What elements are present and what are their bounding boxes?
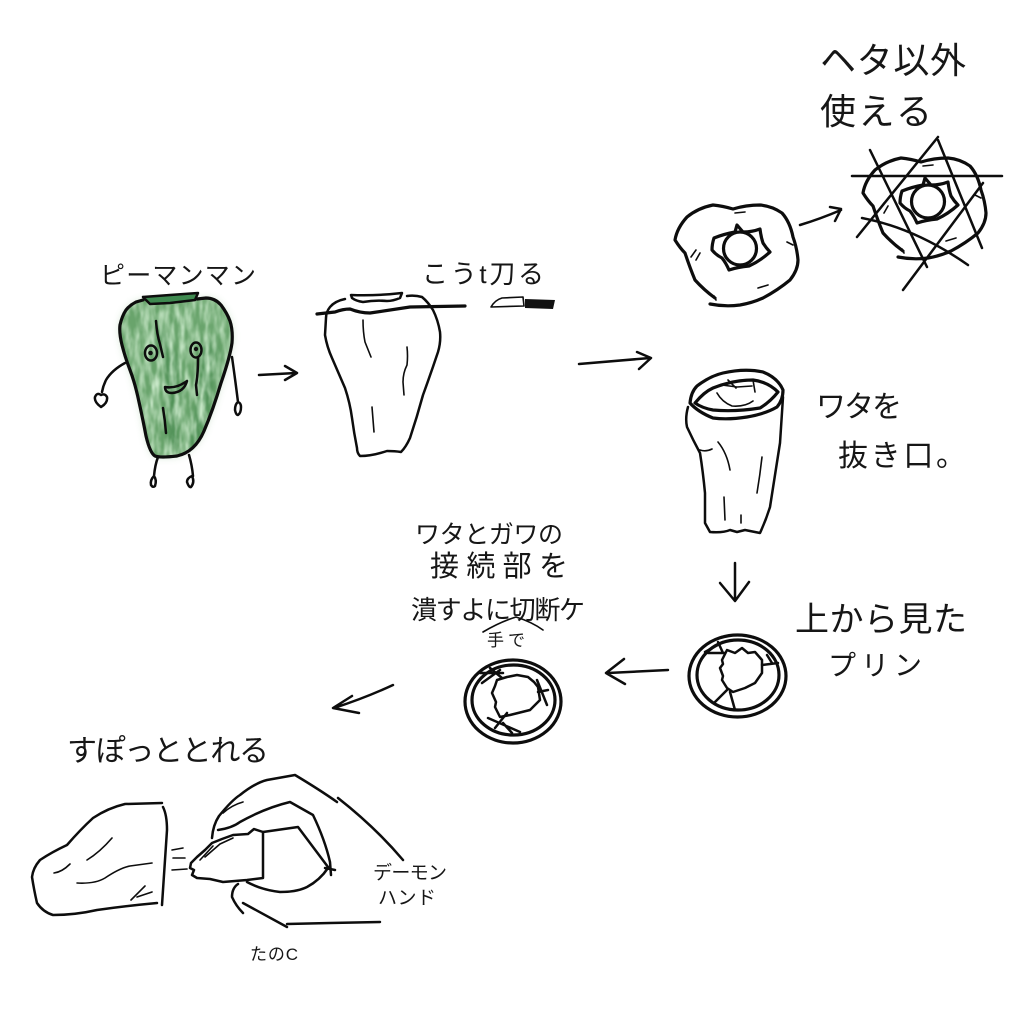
label: ハンド: ハンド xyxy=(378,888,436,909)
label: ワタとガワの: ワタとガワの xyxy=(415,521,563,549)
label: 潰すように切断: 潰すよに切断ケ xyxy=(411,595,585,625)
arrow xyxy=(800,207,841,225)
label: ヘタ以外: ヘタ以外 xyxy=(820,40,966,81)
top view pudding xyxy=(689,635,786,717)
caret xyxy=(483,617,543,632)
label: すぽっととれる: すぽっととれる xyxy=(67,735,269,768)
arrow: left xyxy=(606,659,668,684)
label: 抜き口。: 抜き口。 xyxy=(838,440,966,473)
demon hand with core xyxy=(190,775,403,927)
face xyxy=(145,321,202,433)
arrow xyxy=(259,366,297,380)
label: ワタを: ワタを xyxy=(816,391,902,424)
label: デーモン: デーモン xyxy=(373,862,447,884)
arrow xyxy=(579,352,651,369)
stem xyxy=(143,293,198,304)
pulled out chunk xyxy=(32,803,187,915)
label: ピーマンマン: ピーマンマン xyxy=(100,262,256,290)
arrow: down left xyxy=(333,685,393,713)
cut pepper xyxy=(317,293,465,456)
character: pepper man xyxy=(95,290,241,487)
hollow pepper tube xyxy=(686,370,783,533)
arms and legs xyxy=(95,363,125,407)
label: たのC: たのC xyxy=(250,945,298,964)
label: 接続部を: 接続部を xyxy=(430,550,568,583)
top view with cuts xyxy=(465,660,561,743)
label: 上から見た: 上から見た xyxy=(795,601,967,639)
arrow: down xyxy=(720,563,749,601)
donut: cap xyxy=(675,205,798,306)
label: こう切る: こうt刀る xyxy=(422,259,544,289)
body outline xyxy=(120,298,232,457)
label: 使える: 使える xyxy=(820,91,932,132)
label: プリン: プリン xyxy=(828,650,922,681)
watercolor body xyxy=(115,290,237,460)
label: 手で: 手で xyxy=(487,631,525,650)
donut: cap crossed out xyxy=(852,137,1002,290)
icon: knife xyxy=(491,297,555,309)
